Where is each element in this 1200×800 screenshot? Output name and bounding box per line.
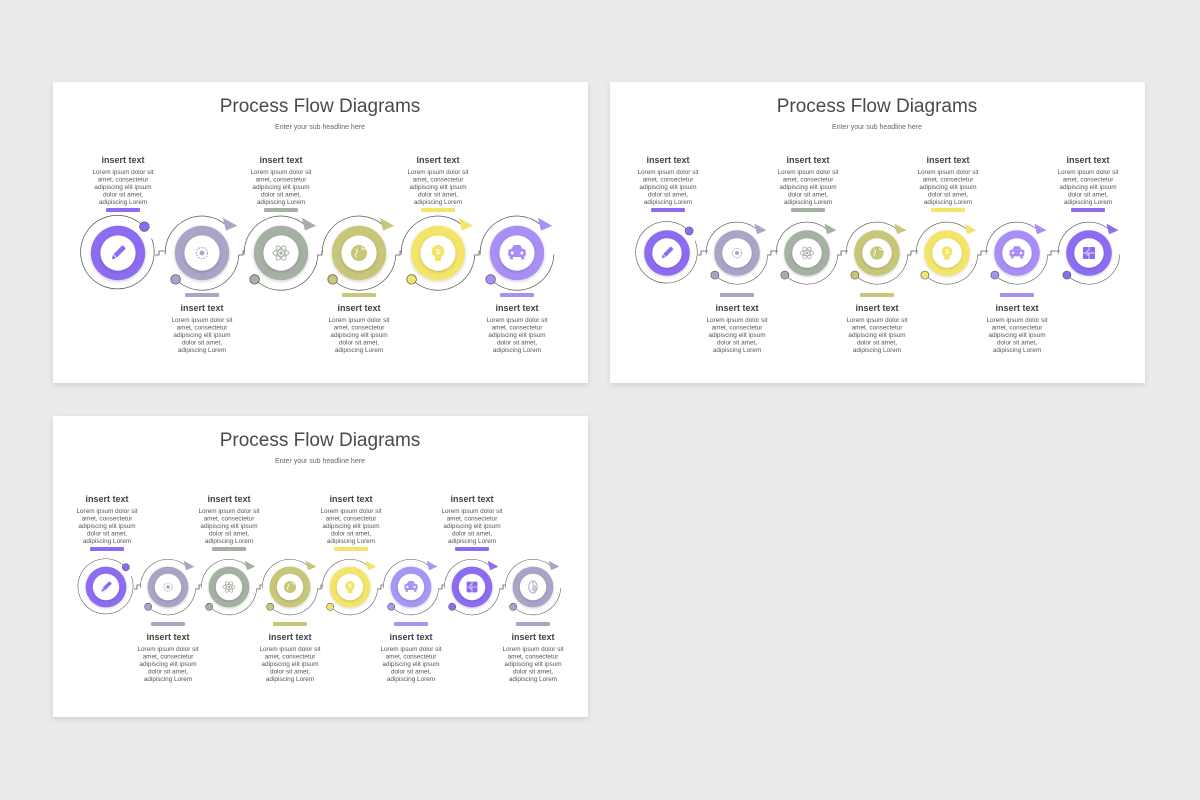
text: step 4: insert text [855,303,899,313]
panel: slide 3 [53,416,588,717]
subtitle: slide 2: Enter your sub headline here [832,124,922,131]
text: step 7: insert text [450,494,494,504]
text: step 6: insert text [495,303,539,313]
text: step 2 [171,293,233,354]
step 5 [322,559,378,615]
text: step 2: insert text [715,303,759,313]
text: step 4: insert text [268,632,312,642]
step 6 [986,222,1048,284]
step 5 [916,222,978,284]
text: step 3: insert text [207,494,251,504]
title: slide 3: Process Flow Diagrams [220,430,420,451]
text: step 6 [986,293,1048,354]
text: step 7: insert text [1066,155,1110,165]
text: step 2: insert text [146,632,190,642]
text: step 3: insert text [786,155,830,165]
step 5 [401,216,475,290]
text: step 5: insert text [416,155,460,165]
connectors: slide 3 [134,585,505,589]
text: step 1 [92,155,154,212]
text: step 7 [1057,155,1119,212]
text: step 6 [486,293,548,354]
text: step 4 [328,293,390,354]
text: step 4 [259,622,321,683]
text: step 4: insert text [337,303,381,313]
title: slide 1: Process Flow Diagrams [220,96,420,117]
step 2 [140,559,196,615]
step 4 [322,216,396,290]
step 7 [444,559,500,615]
connectors: slide 1 [155,251,480,255]
text: step 5: insert text [329,494,373,504]
step 7 [1058,222,1120,284]
text: step 3: insert text [259,155,303,165]
subtitle: slide 3: Enter your sub headline here [275,458,365,465]
text: step 8: insert text [511,632,555,642]
step 4 [262,559,318,615]
text: step 7 [441,494,503,551]
step 1 [78,559,133,614]
text: step 3 [777,155,839,212]
text: step 6 [380,622,442,683]
text: step 6: insert text [389,632,433,642]
step 2 [706,222,768,284]
panel: slide 1 [53,82,588,383]
step 1 [636,221,697,283]
title: slide 2: Process Flow Diagrams [777,96,977,117]
panel: slide 2 [610,82,1145,383]
step 4 [846,222,908,284]
text: step 4 [846,293,908,354]
text: step 2 [137,622,199,683]
step 3 [776,222,838,284]
text: step 2: insert text [180,303,224,313]
text: step 1 [76,494,138,551]
text: step 2 [706,293,768,354]
subtitle: slide 1: Enter your sub headline here [275,124,365,131]
text: step 1: insert text [85,494,129,504]
text: step 1: insert text [646,155,690,165]
step 8 [505,559,561,615]
step 3 [244,216,318,290]
step 3 [201,559,257,615]
connectors: slide 2 [698,251,1060,255]
text: step 1: insert text [101,155,145,165]
step 6 [480,216,554,290]
text: step 3 [198,494,260,551]
step 6 [383,559,439,615]
text: step 5 [320,494,382,551]
text: step 3 [250,155,312,212]
step 2 [165,216,239,290]
text: step 5 [917,155,979,212]
step 1 [81,215,154,289]
text: step 5: insert text [926,155,970,165]
text: step 1 [637,155,699,212]
text: step 6: insert text [995,303,1039,313]
text: step 8 [502,622,564,683]
text: step 5 [407,155,469,212]
